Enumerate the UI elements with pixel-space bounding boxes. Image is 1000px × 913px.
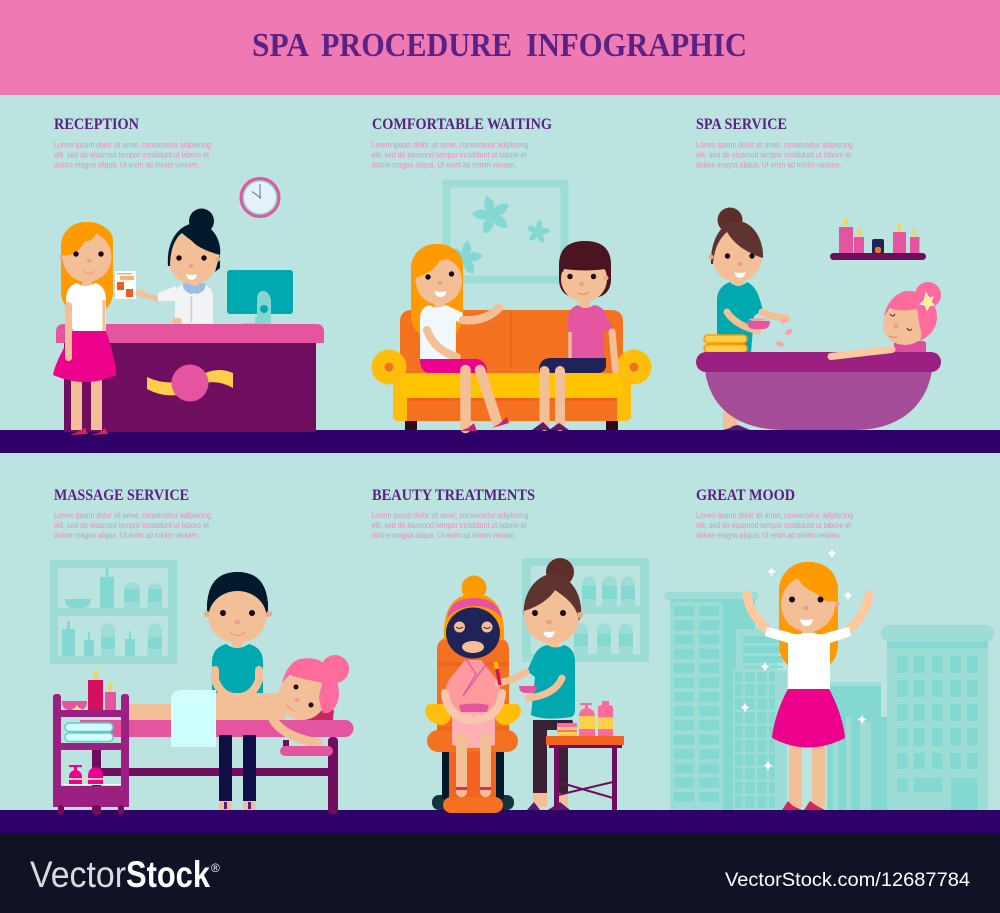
customer at desk: [53, 222, 116, 435]
header banner: [0, 0, 1000, 95]
chair foot rest: [443, 797, 503, 813]
text block: spa service: dolore magna aliqua. Ut enim ad minim veniam.: [696, 160, 841, 170]
panel: spa service: [696, 116, 941, 430]
candle shelf: [830, 218, 926, 260]
logo: Stock: [126, 853, 210, 895]
text block: reception: [54, 140, 211, 170]
text block: spa service: Lorem ipsum dolor sit amet, consectetur adipiscing: [696, 140, 853, 150]
text block: great mood: elit, sed do eiusmod tempor incididunt ut labore et: [696, 520, 852, 530]
text block: waiting: Lorem ipsum dolor sit amet, consectetur adipiscing: [372, 140, 529, 150]
towel on client: [171, 690, 216, 747]
sparkles: [740, 549, 866, 770]
client in face mask: [444, 576, 504, 797]
massage trolley: [53, 670, 129, 815]
panel: beauty treatments: [372, 487, 649, 813]
text block: massage: [54, 510, 211, 540]
panel: great mood: [664, 487, 994, 810]
text block: spa service: elit, sed do eiusmod tempor incididunt ut labore et: [696, 150, 852, 160]
heading: spa service: SPA SERVICE: [696, 116, 787, 133]
receptionist: [135, 208, 220, 324]
text block: reception: dolore magna aliqua. Ut enim ad minim veniam.: [54, 160, 199, 170]
side table with products: [546, 701, 624, 810]
icon: hair flower: [920, 293, 934, 310]
beautician: [496, 558, 583, 810]
title: [252, 27, 747, 64]
text block: great mood: dolore magna aliqua. Ut enim ad minim veniam.: [696, 530, 841, 540]
logo: [30, 853, 220, 895]
text block: massage: dolore magna aliqua. Ut enim ad minim veniam.: [54, 530, 199, 540]
title: INFOGRAPHIC: [526, 27, 747, 64]
text block: reception: Lorem ipsum dolor sit amet, consectetur adipiscing: [54, 140, 211, 150]
icon: wall clock: [240, 177, 280, 218]
footer: VectorStock watermark: [0, 833, 1000, 913]
heading: massage service: MASSAGE SERVICE: [54, 487, 189, 504]
image id: VectorStock.com/12687784: [725, 869, 970, 891]
text block: beauty: [372, 510, 529, 540]
text block: reception: elit, sed do eiusmod tempor incididunt ut labore et: [54, 150, 210, 160]
wall shelf silhouette: [50, 560, 177, 664]
computer monitor: [227, 270, 293, 325]
panel: massage service: [50, 487, 354, 815]
heading: great mood: GREAT MOOD: [696, 487, 795, 504]
seated woman, brown bob: [532, 241, 616, 430]
panel: reception: [53, 116, 324, 435]
floor band: bottom row: [0, 810, 1000, 833]
text block: massage: Lorem ipsum dolor sit amet, consectetur adipiscing: [54, 510, 211, 520]
text block: waiting: [372, 140, 529, 170]
text block: spa service: [696, 140, 853, 170]
text block: beauty: elit, sed do eiusmod tempor incididunt ut labore et: [372, 520, 527, 530]
logo: Vector: [30, 853, 126, 895]
text block: beauty: Lorem ipsum dolor sit amet, consectetur adipiscing: [372, 510, 529, 520]
therapist with petal bowl: [708, 208, 794, 353]
heading: beauty treatments: BEAUTY TREATMENTS: [372, 487, 535, 504]
leaflet held by receptionist: [115, 271, 136, 299]
therapist feet behind tub: [723, 412, 750, 430]
wall picture with flowers: [444, 184, 564, 280]
client lying on table: [127, 655, 349, 747]
title: SPA: [252, 27, 309, 64]
panel: comfortable waiting: [372, 116, 652, 431]
text block: waiting: elit, sed do eiusmod tempor incididunt ut labore et: [372, 150, 527, 160]
text block: beauty: dolore magna aliqua. Ut enim ad minim veniam.: [372, 530, 516, 540]
treatment chair: [425, 638, 521, 810]
reception desk: [56, 324, 324, 432]
heading: comfortable waiting: COMFORTABLE WAITING: [372, 116, 552, 133]
title: PROCEDURE: [321, 27, 512, 64]
headrest support: [280, 746, 333, 756]
sofa: [372, 310, 652, 430]
stacked towels: [704, 335, 747, 352]
bathtub: [696, 352, 941, 430]
happy woman with raised arms: [747, 562, 869, 810]
therapist man: [204, 572, 272, 810]
floor band: top row: [0, 430, 1000, 453]
text block: waiting: dolore magna aliqua. Ut enim ad minim veniam.: [372, 160, 516, 170]
text block: great mood: Lorem ipsum dolor sit amet, consectetur adipiscing: [696, 510, 853, 520]
logo: ®: [211, 861, 220, 875]
massage table: [80, 720, 354, 814]
text block: great mood: [696, 510, 853, 540]
heading: reception: RECEPTION: [54, 116, 139, 133]
seated woman, orange hair: [411, 244, 509, 431]
wall shelf with bottles: [522, 558, 649, 662]
text block: massage: elit, sed do eiusmod tempor incididunt ut labore et: [54, 520, 210, 530]
woman in bath: [831, 282, 941, 356]
city skyline: [664, 592, 994, 810]
